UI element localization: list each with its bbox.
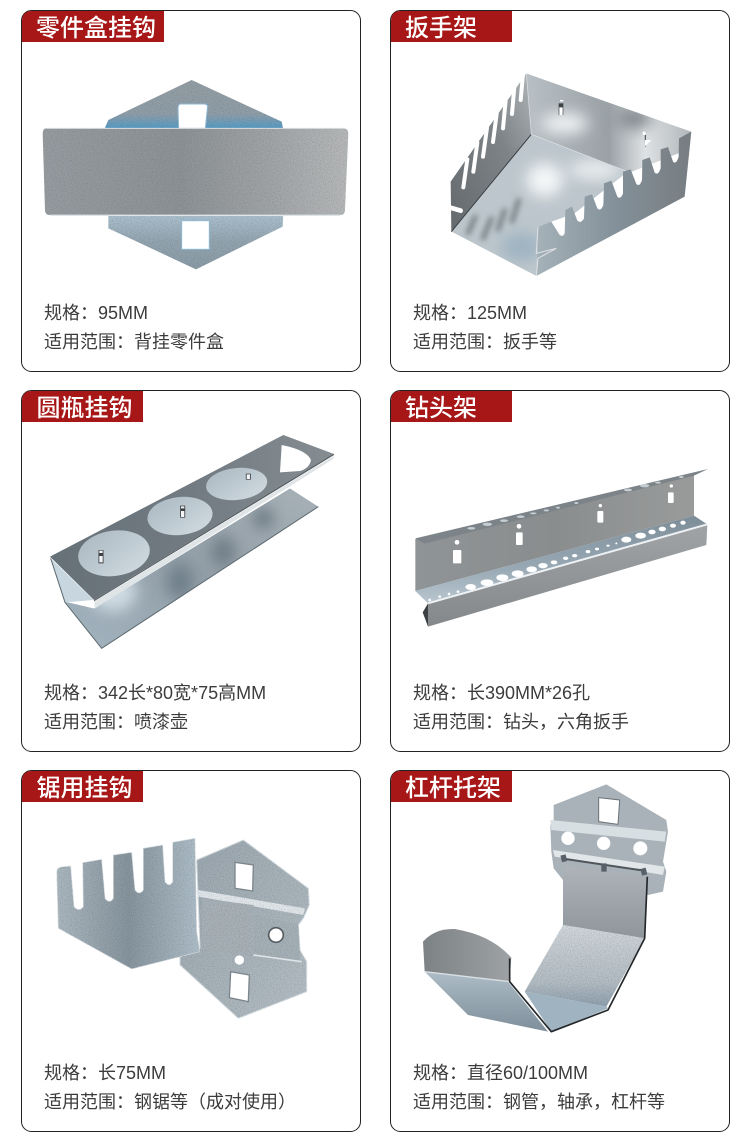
- spec text: 规格：95MM: [44, 303, 148, 323]
- heading: 扳手架: [391, 11, 512, 42]
- spec text: 适用范围：钢管，轴承，杠杆等: [413, 1092, 665, 1112]
- heading: 锯用挂钩: 锯用挂钩: [36, 775, 132, 802]
- panel: 钻头架: [390, 390, 730, 752]
- heading: 扳手架: 扳手架: [405, 15, 477, 42]
- product photo: lever bracket: [423, 784, 668, 1032]
- spec text: 适用范围：背挂零件盒: [44, 332, 224, 352]
- heading: 零件盒挂钩: 零件盒挂钩: [36, 15, 156, 42]
- heading: 杠杆托架: [391, 771, 512, 802]
- panel: 杠杆托架: [390, 770, 730, 1132]
- panel: 圆瓶挂钩: [22, 390, 360, 752]
- spec text: 规格：125MM: [413, 303, 527, 323]
- spec text: 规格：长390MM*26孔: [413, 683, 590, 703]
- spec text: [44, 1063, 296, 1112]
- spec text: [44, 683, 266, 732]
- spec text: [413, 683, 629, 732]
- spec text: 适用范围：喷漆壶: [44, 712, 188, 732]
- product photo: saw hook: [57, 838, 309, 1018]
- spec text: 规格：直径60/100MM: [413, 1063, 588, 1083]
- heading: 圆瓶挂钩: [22, 391, 143, 422]
- panel: 锯用挂钩: [22, 770, 360, 1132]
- spec text: [413, 1063, 665, 1112]
- product photo: parts box hook: [43, 80, 348, 269]
- spec text: [413, 303, 557, 352]
- panel: 扳手架: [390, 10, 730, 372]
- product photo: wrench rack: [449, 73, 691, 276]
- heading: 钻头架: [391, 391, 512, 422]
- spec text: 规格：342长*80宽*75高MM: [44, 683, 266, 703]
- spec text: 适用范围：扳手等: [413, 332, 557, 352]
- heading: 圆瓶挂钩: 圆瓶挂钩: [36, 395, 132, 422]
- spec text: 适用范围：钢锯等（成对使用）: [44, 1092, 296, 1112]
- panel: 零件盒挂钩: [22, 10, 360, 372]
- spec text: [44, 303, 224, 352]
- product photo: drill bit rack: [415, 469, 708, 627]
- spec text: 适用范围：钻头，六角扳手: [413, 712, 629, 732]
- heading: 锯用挂钩: [22, 771, 143, 802]
- spec text: 规格：长75MM: [44, 1063, 166, 1083]
- heading: 钻头架: 钻头架: [405, 395, 477, 422]
- product photo: round bottle hook: [50, 435, 334, 648]
- heading: 杠杆托架: 杠杆托架: [405, 775, 501, 802]
